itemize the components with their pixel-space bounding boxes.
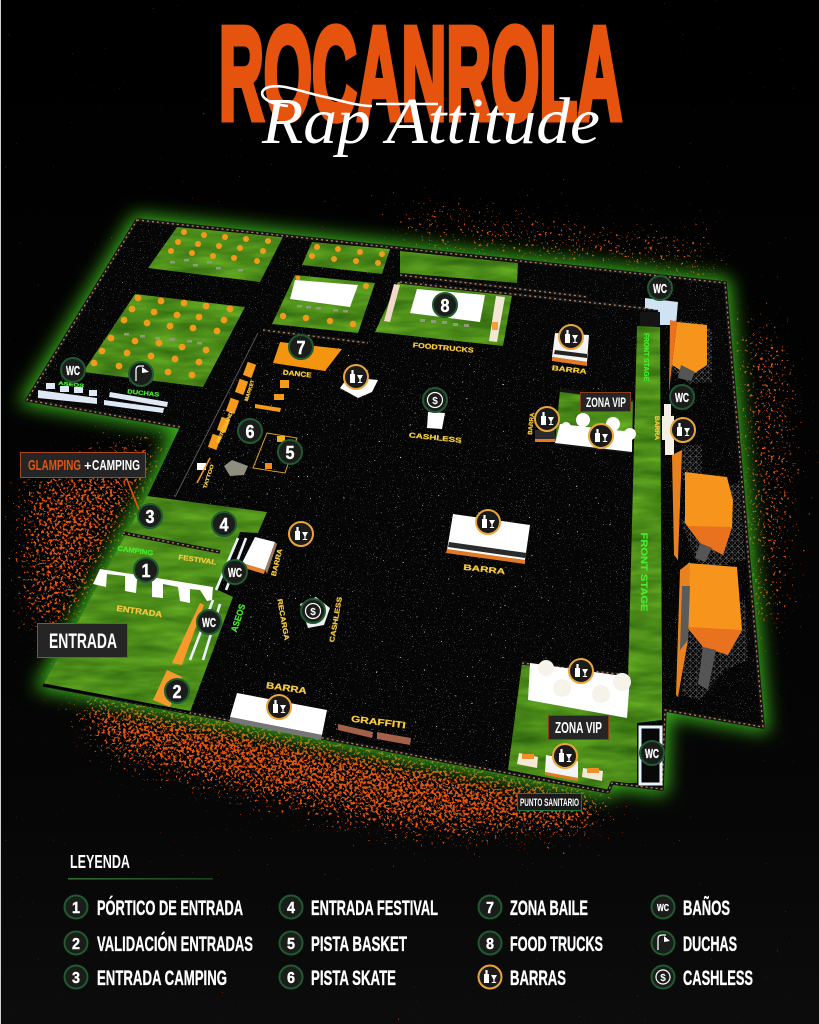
marker 4 [212, 512, 236, 536]
label: toilets north: ASEOS [58, 381, 85, 389]
grass zones [43, 227, 662, 790]
wc marker stage [670, 385, 694, 409]
label: north east bar: BARRA [551, 365, 587, 376]
wc marker entrance [197, 610, 221, 634]
recharge kiosk [300, 597, 330, 628]
legend item 6: 6 [287, 970, 295, 987]
label: graffiti: GRAFFITI [350, 714, 406, 730]
bar marker 3 [535, 407, 559, 431]
label: market: MARKET [244, 379, 256, 402]
bar marker 8 [267, 695, 291, 719]
marker 3 [138, 504, 162, 528]
callout: punto sanitario: PUNTO SANITARIO [520, 797, 579, 809]
callout: entrada [38, 624, 128, 658]
legend item 3: 3 [72, 970, 80, 987]
legend item duchas [652, 932, 737, 956]
legend item 7 [478, 896, 588, 920]
wc marker festival gate: WC [228, 565, 242, 580]
legend item 7: 7 [486, 900, 494, 917]
legend item 4 [280, 896, 438, 920]
callout: zona vip lower [548, 716, 608, 740]
vip upper white area [535, 413, 636, 452]
toilets and showers north [38, 383, 168, 413]
bar marker 10 [553, 744, 577, 768]
legend item barras [478, 966, 566, 990]
label: front stage north: FRONT STAGE [642, 333, 649, 381]
vip lower white area [528, 660, 631, 718]
entrance portico [93, 569, 213, 603]
vip food stands [517, 753, 603, 781]
icon: cashless south [301, 599, 325, 623]
bar marker 4 [589, 424, 613, 448]
marker 7 [289, 335, 313, 359]
callout: punto sanitario [518, 794, 582, 810]
legend item barras: BARRAS [510, 967, 566, 990]
wc marker west: WC [66, 363, 80, 378]
legend item 1: 1 [72, 900, 80, 917]
wc marker vip [640, 741, 664, 765]
label: recharge: RECARGA [275, 598, 290, 641]
legend item 4: 4 [287, 900, 295, 917]
dance area [273, 342, 342, 371]
wc marker stage: WC [675, 390, 689, 405]
callout: glamping camping: GLAMPING [28, 457, 81, 474]
marker 6: 6 [246, 422, 254, 442]
numbered markers [134, 293, 457, 703]
entrance orange structures [153, 603, 204, 707]
white hex bar [340, 377, 378, 398]
icon: cashless south: $ [310, 607, 316, 618]
wc marker north east: WC [653, 281, 667, 296]
label: bar south: BARRA [265, 680, 308, 696]
legend item 8: FOOD TRUCKS [510, 933, 603, 956]
legend item 5: 5 [287, 936, 295, 953]
legend item 1 [64, 896, 243, 920]
stage side bars [662, 404, 674, 455]
toilet markers [61, 276, 694, 765]
icon: cashless north [423, 388, 447, 412]
label: bar by entrance: BARRA [271, 548, 284, 577]
label: cashless north: CASHLESS [408, 432, 462, 445]
legend item banos: WC [657, 903, 669, 914]
stage three [676, 562, 742, 697]
label: vip bar: BARRA [528, 412, 536, 435]
label: front stage south: FRONT STAGE [639, 532, 649, 612]
legend [64, 852, 753, 990]
callout: zona vip lower: ZONA VIP [555, 720, 602, 737]
bar marker 6 [476, 510, 500, 534]
bar marker 9 [569, 659, 593, 683]
label: dance: DANCE [282, 370, 312, 380]
fences [27, 220, 763, 792]
legend item banos [652, 896, 730, 920]
legend item 5: PISTA BASKET [311, 933, 407, 956]
marker 1: 1 [142, 561, 150, 581]
scaffolds [670, 320, 748, 700]
legend item 3: ENTRADA CAMPING [97, 967, 227, 990]
callout: glamping camping: + [84, 458, 92, 473]
legend item cashless: CASHLESS [683, 967, 753, 990]
legend item cashless: $ [660, 973, 666, 984]
callout: glamping camping [20, 452, 146, 478]
bar by entrance [241, 537, 277, 574]
legend item 4: ENTRADA FESTIVAL [311, 897, 438, 920]
label: entrance zone: ENTRADA [116, 604, 163, 619]
legend item 2: 2 [72, 936, 80, 953]
graffiti walls [338, 724, 411, 745]
venue ground [27, 220, 763, 792]
vip toilets [640, 727, 661, 784]
legend item 6: PISTA SKATE [311, 967, 396, 990]
marker 2: 2 [172, 682, 182, 702]
map labels [58, 333, 659, 730]
orange paint spatter [15, 200, 800, 840]
legend item 1: PÓRTICO DE ENTRADA [97, 896, 243, 920]
marker 6 [238, 419, 262, 443]
white screens [290, 280, 485, 322]
subtitle: Rap Attitude: Rap Attitude [261, 85, 600, 158]
entrance toilets [190, 538, 246, 660]
stage two [672, 450, 733, 562]
legend item duchas: DUCHAS [683, 933, 737, 956]
stage one [669, 320, 707, 392]
stage toilets north [640, 298, 678, 326]
legend item 2: VALIDACIÓN ENTRADAS [97, 932, 253, 956]
bar marker 7 [289, 522, 313, 546]
callout: glamping camping: CAMPING [92, 457, 140, 474]
glamping tents [124, 259, 469, 344]
bar marker 1 [344, 365, 368, 389]
label: stage bar: BARRA [653, 416, 659, 441]
legend title: LEYENDA [70, 852, 130, 872]
food trucks row [384, 284, 505, 342]
marker 8: 8 [440, 296, 450, 316]
marker 5 [278, 440, 302, 464]
legend item 8 [478, 932, 603, 956]
bar north east [552, 333, 589, 366]
bar markers [267, 325, 695, 768]
legend item 7: ZONA BAILE [510, 897, 588, 920]
callout: zona vip upper: ZONA VIP [586, 394, 626, 410]
market and skate zone [197, 362, 297, 483]
central bar [446, 514, 530, 564]
label: showers: DUCHAS [127, 389, 159, 399]
marker 8 [433, 293, 457, 317]
legend item 8: 8 [486, 936, 494, 953]
label: cashless south: CASHLESS [329, 596, 344, 643]
label: toilets east: ASEOS [229, 603, 247, 633]
label: central bar: BARRA [463, 563, 506, 576]
wc marker festival gate [223, 560, 247, 584]
legend item 5 [280, 932, 407, 956]
callout: zona vip upper [580, 392, 630, 412]
legend item 6 [280, 966, 396, 990]
label: tattoo: TATTOO [202, 464, 216, 490]
wc marker west [61, 358, 85, 382]
camping tents [91, 229, 385, 378]
icon: cashless north: $ [432, 396, 438, 407]
marker 7: 7 [296, 338, 306, 358]
marker 2 [165, 679, 189, 703]
green glow around venue [27, 220, 763, 792]
callout line to camping [126, 477, 143, 520]
legend item cashless [652, 966, 753, 990]
marker 4: 4 [220, 515, 228, 535]
legend item 2 [64, 932, 253, 956]
wc marker north east [648, 276, 672, 300]
marker 3: 3 [146, 507, 154, 527]
bar marker 5 [671, 418, 695, 442]
icon: showers [129, 362, 153, 386]
marker 5: 5 [286, 443, 294, 463]
label: merchandising: MERCHAND [215, 410, 235, 444]
wc marker vip: WC [645, 746, 659, 761]
cashless kiosk [427, 412, 445, 429]
label: food trucks: FOODTRUCKS [412, 342, 474, 355]
label: campsite gate: CAMPING [117, 546, 154, 558]
wc marker entrance: WC [202, 615, 216, 630]
marker 1 [134, 558, 158, 582]
bar south [230, 693, 327, 740]
bar marker 2 [559, 325, 583, 349]
label: festival gate: FESTIVAL [178, 554, 217, 567]
callout: entrada: ENTRADA [49, 630, 117, 653]
legend item 3 [64, 966, 227, 990]
legend item banos: BAÑOS [683, 897, 730, 920]
